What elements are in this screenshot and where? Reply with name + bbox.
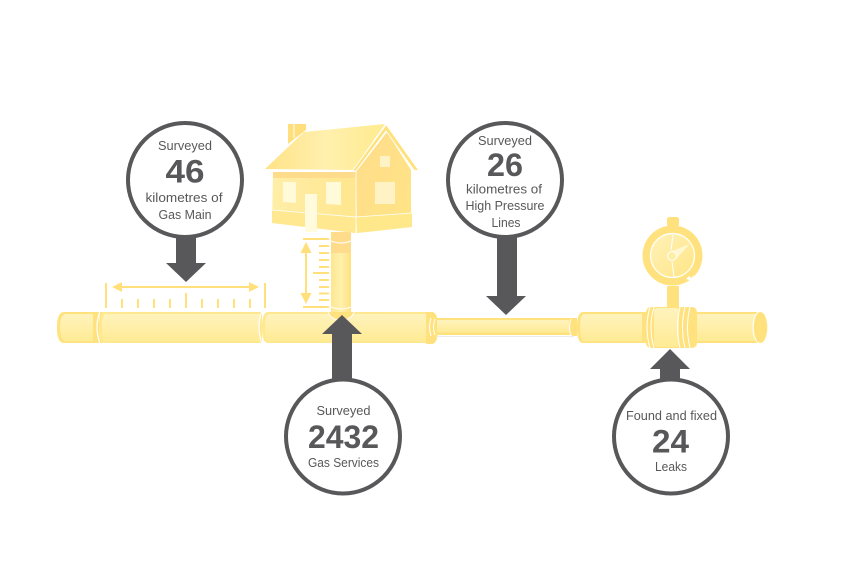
callout: gas services [286,380,400,494]
arrow: high pressure lines [486,236,526,315]
left pipe section [57,311,438,344]
callout: high pressure lines: Surveyed [478,133,532,148]
callout: gas services: Gas Services [308,455,379,470]
gas main measure [106,282,265,308]
callout: gas services: Surveyed [316,403,370,418]
callout: leaks: Found and fixed [626,408,717,423]
side wall [356,132,411,233]
callout: leaks [614,380,728,494]
chimney [288,124,306,144]
windows and door [283,182,296,203]
house [265,124,418,233]
high pressure thin pipe [430,318,577,336]
front wall [272,172,356,233]
right pipe section [577,311,768,344]
callout: high pressure lines: High Pressure [466,198,544,213]
roof [265,124,385,170]
pressure gauge [642,217,702,307]
service depth measure [300,239,329,307]
arrow: gas services [322,315,362,382]
arrow: leaks [650,349,690,382]
callout: gas main: kilometres of [146,190,223,205]
pipe coupling [646,307,697,348]
callout: gas services: 2432 [308,419,379,455]
arrow: gas main [166,236,206,282]
callout: gas main: 46 [166,154,204,190]
callout: high pressure lines [448,123,562,237]
callout: high pressure lines: 26 [487,147,523,183]
pipeline [57,307,768,348]
callout: high pressure lines: Lines [492,215,521,230]
callout: high pressure lines: kilometres of [466,182,542,196]
callout: leaks: 24 [652,424,689,460]
callout: gas main [128,123,242,237]
callout: gas main: Surveyed [158,138,212,153]
callout: leaks: Leaks [655,459,687,474]
service pipe riser [328,232,354,320]
callout: gas main: Gas Main [158,207,212,222]
